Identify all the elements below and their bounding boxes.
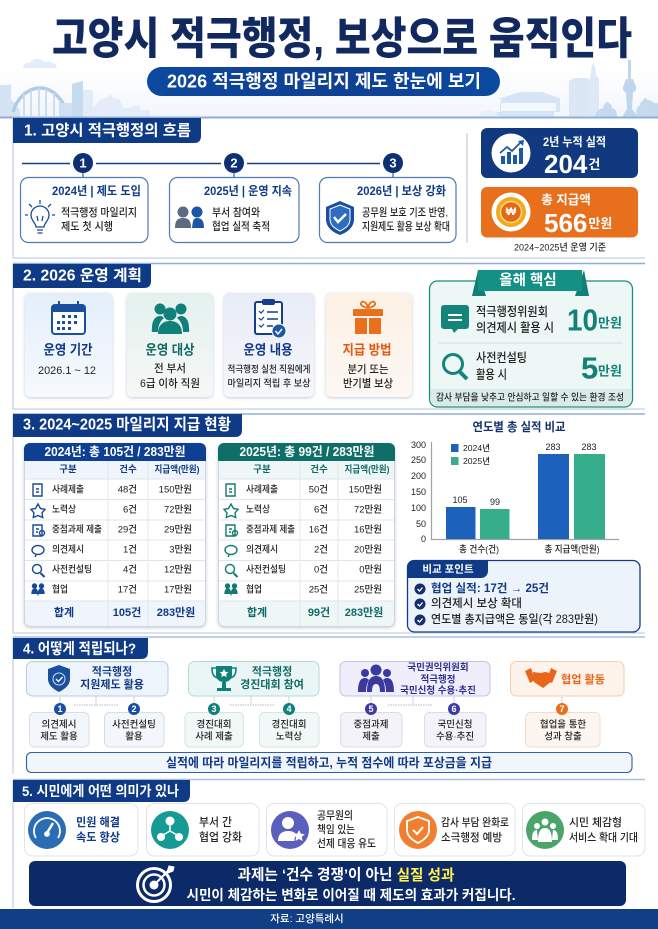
card: collaboration: 부서 간 — [199, 816, 232, 829]
panel: key points: 의견제시 활용 시 — [476, 320, 554, 335]
table: 2025: 16건 — [309, 524, 328, 536]
icons: row markers 2024 — [31, 484, 45, 594]
table: 2024: 건수 — [119, 464, 137, 476]
table: 2025: 6건 — [314, 504, 328, 516]
icon: won coin: ₩ — [506, 206, 517, 218]
table: 2025: 99건 — [308, 606, 330, 619]
card: 2026 — [320, 178, 456, 242]
card: target — [127, 293, 213, 397]
bar chart: 총 건수(건) — [459, 544, 499, 556]
panel: key points: 10 — [567, 302, 598, 338]
ribbon: 올해 핵심 — [499, 272, 557, 289]
table: 2024: 노력상 — [52, 504, 76, 516]
table: 2025: 사전컨설팅 — [246, 564, 286, 576]
group: citizen proposal: 적극행정 — [421, 674, 455, 686]
bar chart: 총 지급액(만원) — [544, 544, 600, 556]
icon: team — [152, 304, 189, 334]
card: period: 운영 기간 — [44, 342, 93, 358]
table: 2024: 283만원 — [157, 605, 195, 619]
card: content: 적극행정 실천 직원에게 — [228, 364, 310, 376]
table: 2024: 3만원 — [169, 544, 192, 556]
card: content: 운영 내용 — [244, 342, 292, 358]
panel: key points: 감사 부담을 낮추고 안심하고 일할 수 있는 환경 조성 — [436, 392, 624, 404]
table: 2025: 20만원 — [354, 544, 382, 556]
table: 2024: 중점과제 제출 — [52, 524, 102, 536]
card: 2025: 부서 참여와 — [212, 206, 260, 219]
table: 2025: 2025년: 총 99건 / 283만원 — [240, 445, 374, 459]
summary bar — [26, 752, 632, 772]
icon: magnifier — [444, 354, 467, 379]
table: 2024: 1건 — [123, 544, 137, 556]
numbered steps: 4 — [286, 704, 292, 714]
legend: 2025년 — [463, 456, 490, 466]
heading: section 1: 1. 고양시 적극행정의 흐름 — [24, 122, 191, 140]
bar chart: 99 — [490, 497, 500, 507]
card: audit relief: 감사 부담 완화로 — [441, 816, 509, 829]
card: speed: 민원 해결 — [76, 815, 120, 829]
table: 2024: 합계 — [54, 605, 74, 619]
step boxes: 중점과제 — [354, 718, 388, 730]
table: 2025 — [218, 443, 395, 626]
group: support system: 적극행정 — [92, 664, 132, 678]
table: 2025: 협업 — [246, 584, 262, 596]
group: contest: 경진대회 참여 — [240, 677, 304, 691]
heading: section 5 — [13, 780, 190, 802]
icons: check marks — [414, 584, 426, 626]
icon: rising chart — [500, 140, 524, 164]
step boxes: 제출 — [362, 732, 380, 742]
table: 2025: 2건 — [314, 544, 328, 556]
header background with skyline — [0, 59, 658, 118]
table: 2024: 17만원 — [164, 584, 192, 596]
card: responsibility — [266, 804, 387, 856]
stat: cumulative: 204건 — [544, 149, 600, 179]
banner — [29, 861, 626, 906]
table: 2025: 72만원 — [354, 504, 382, 516]
heading: section 2: 2. 2026 운영 계획 — [23, 266, 142, 284]
card: content: 마일리지 적립 후 보상 — [228, 378, 311, 390]
banner: 시민이 체감하는 변화로 이어질 때 제도의 효과가 커집니다. — [186, 887, 516, 903]
timeline: 3 — [389, 156, 397, 170]
group: citizen proposal: 국민신청 수용·추진 — [400, 684, 476, 696]
card: content — [224, 293, 314, 397]
icon: handshake — [525, 668, 557, 688]
icon: won coin — [496, 197, 526, 227]
card: speed: 속도 향상 — [76, 830, 120, 844]
card: responsibility: 선제 대응 유도 — [317, 836, 376, 850]
timeline — [22, 150, 406, 177]
table: 2024: 72만원 — [164, 504, 192, 516]
table: 2024: 17건 — [118, 584, 137, 596]
summary bar: 실적에 따라 마일리지를 적립하고, 누적 점수에 따라 포상금을 지급 — [166, 755, 492, 770]
table: 2024: 150만원 — [159, 484, 192, 496]
group: support system: 지원제도 활용 — [80, 677, 144, 691]
card: method: 반기별 보상 — [343, 377, 393, 390]
stat: cumulative: 2년 누적 실적 — [543, 135, 606, 149]
bar chart: 283 — [581, 442, 597, 452]
card: target: 전 부서 — [154, 362, 186, 375]
card: 2026: 지원제도 활용 보상 확대 — [362, 219, 450, 233]
bar chart: 200 — [411, 471, 426, 481]
card: method — [326, 293, 412, 397]
heading: section 3: 3. 2024~2025 마일리지 지급 현황 — [23, 416, 231, 434]
card: method: 분기 또는 — [348, 363, 388, 376]
icon: gauge — [34, 818, 60, 838]
card: responsibility: 공무원의 — [317, 808, 353, 822]
stat: total paid — [481, 187, 638, 238]
icon: speech bubble — [441, 305, 469, 333]
panel: section 4 how to earn — [13, 637, 645, 780]
icon: people — [175, 206, 204, 228]
table: 2025: 합계 — [247, 605, 267, 619]
group: citizen proposal — [340, 662, 490, 696]
table: 2024: 48건 — [118, 484, 137, 496]
table: 2025: 지급액(만원) — [344, 464, 390, 476]
numbered steps: 5 — [368, 704, 374, 714]
card: 2024: 2024년 | 제도 도입 — [52, 183, 141, 198]
panel: section 1 flow — [0, 118, 658, 258]
group: contest: 적극행정 — [252, 664, 292, 678]
panel: comparison points: 협업 실적: 17건 → 25건 — [431, 581, 549, 595]
table: 2024: 지급액(만원) — [154, 464, 200, 476]
table: 2024: 4건 — [123, 564, 137, 576]
card: collaboration: 협업 강화 — [199, 830, 242, 844]
icon: network — [157, 816, 183, 841]
table: 2025: 0건 — [314, 564, 328, 576]
step boxes: 의견제시 — [42, 720, 76, 730]
group: collaboration: 협업 활동 — [561, 672, 605, 686]
table: 2025: 50건 — [309, 484, 328, 496]
icon: checklist — [255, 299, 286, 338]
table: 2025: 구분 — [253, 464, 271, 476]
timeline: 2 — [230, 156, 238, 170]
panel: key points: 사전컨설팅 — [476, 351, 527, 365]
table: 2024: 구분 — [59, 464, 77, 476]
group: contest — [188, 662, 319, 696]
panel: key points: 5 — [581, 350, 598, 386]
panel: section 5 meaning — [13, 780, 645, 908]
numbered steps: 3 — [211, 704, 217, 714]
numbered steps: 1 — [57, 704, 63, 714]
table: 2025: 25건 — [309, 584, 328, 596]
bar chart: 250 — [411, 455, 426, 465]
footer source: 자료: 고양특례시 — [270, 912, 344, 925]
card: 2025 — [170, 178, 299, 242]
table: 2024: 29건 — [118, 524, 137, 536]
icon: gift — [353, 302, 383, 334]
card: period — [25, 293, 112, 397]
step boxes: 수용·추진 — [436, 732, 474, 742]
card: 2024: 제도 첫 시행 — [61, 220, 113, 233]
table: 2025: 의견제시 — [246, 544, 278, 556]
table: 2025: 0만원 — [359, 564, 382, 576]
panel: key points — [430, 270, 632, 407]
card: 2025: 협업 실적 축적 — [212, 219, 270, 233]
table: 2024: 105건 — [113, 606, 141, 619]
panel: key points: 활용 시 — [476, 367, 507, 382]
card: citizen service: 서비스 확대 기대 — [569, 830, 638, 844]
icon: person with star — [278, 817, 305, 841]
table: 2024: 6건 — [123, 504, 137, 516]
card: 2024 — [20, 178, 148, 242]
card: audit relief: 소극행정 예방 — [441, 831, 502, 844]
timeline: 1 — [79, 156, 87, 170]
table: 2024: 12만원 — [164, 564, 192, 576]
step boxes: 제도 활용 — [40, 730, 78, 742]
card: 2024: 적극행정 마일리지 — [61, 205, 137, 219]
icon: crowd — [532, 818, 558, 842]
panel: comparison points: 비교 포인트 — [422, 562, 474, 576]
card: 2025: 2025년 | 운영 지속 — [204, 184, 292, 198]
step boxes: 경진대회 — [197, 718, 231, 730]
step boxes: 활용 — [125, 730, 143, 742]
banner: 과제는 ‘건수 경쟁’이 아닌 실질 성과 — [238, 866, 455, 884]
card: target: 운영 대상 — [146, 342, 195, 358]
card: speed — [24, 804, 138, 856]
bar chart: 150 — [411, 487, 426, 497]
bar chart: 연도별 총 실적 비교 — [472, 420, 566, 434]
numbered steps: 7 — [559, 704, 565, 714]
legend — [451, 443, 490, 466]
table: 2024: 29만원 — [164, 524, 192, 536]
table: 2025: 건수 — [310, 464, 328, 476]
bar chart: 105 — [452, 495, 468, 505]
panel: section 2 plan — [13, 264, 645, 409]
ribbon — [472, 270, 589, 296]
bar chart: 100 — [411, 503, 426, 513]
bar chart: 0 — [421, 534, 426, 544]
card: audit relief — [394, 804, 515, 856]
step boxes: 국민신청 — [438, 720, 472, 730]
panel: key points: 만원 — [598, 364, 622, 378]
panel: comparison points: 연도별 총지급액은 동일(각 283만원) — [431, 612, 598, 626]
icons: row markers 2025 — [224, 484, 238, 594]
table: 2025: 노력상 — [246, 504, 270, 516]
card: collaboration — [146, 804, 259, 856]
table: 2025: 150만원 — [349, 484, 382, 496]
heading: section 4: 4. 어떻게 적립되나? — [23, 640, 136, 658]
bar chart: 50 — [416, 519, 426, 529]
icon: shield — [48, 665, 70, 692]
table: 2025: 25만원 — [354, 584, 382, 596]
table: 2024: 사례제출 — [52, 484, 84, 496]
table: 2025: 283만원 — [345, 605, 383, 619]
numbered steps — [54, 703, 568, 715]
icon: people — [358, 664, 394, 692]
card: 2026: 공무원 보호 기조 반영, — [362, 205, 448, 219]
card: method: 지급 방법 — [342, 342, 392, 358]
numbered steps: 2 — [131, 704, 137, 714]
step boxes: 경진대회 — [272, 718, 306, 730]
step boxes: 사례 제출 — [195, 732, 233, 742]
icon: target — [138, 866, 174, 902]
step boxes: 협업을 통한 — [540, 718, 586, 730]
card: 2026: 2026년 | 보상 강화 — [357, 183, 446, 198]
panel: comparison points — [407, 560, 640, 632]
footer source — [0, 909, 658, 929]
card: period: 2026.1 ~ 12 — [38, 365, 96, 377]
note: basis: 2024~2025년 운영 기준 — [514, 242, 606, 254]
group: citizen proposal: 국민권익위원회 — [407, 662, 469, 674]
table: 2024: 2024년: 총 105건 / 283만원 — [44, 445, 186, 459]
stat: cumulative — [481, 128, 638, 179]
card: responsibility: 책임 있는 — [317, 822, 355, 836]
icon: calendar — [52, 301, 85, 334]
icon: shield — [326, 201, 354, 235]
group: support system — [26, 662, 168, 696]
panel: comparison points: 의견제시 보상 확대 — [431, 596, 522, 610]
panel: key points: 적극행정위원회 — [476, 304, 548, 319]
step boxes: 성과 창출 — [544, 732, 582, 742]
bar chart — [411, 420, 619, 556]
subtitle pill: 2026 적극행정 마일리지 제도 한눈에 보기 — [167, 72, 481, 92]
panel: key points: 만원 — [598, 316, 622, 330]
stat: total paid: 총 지급액 — [541, 193, 591, 207]
panel: section 3 status — [13, 414, 645, 633]
bar chart: 300 — [411, 440, 426, 450]
icon: trophy — [212, 666, 236, 691]
table: 2024 — [24, 443, 206, 626]
step boxes: 사전컨설팅 — [112, 718, 156, 730]
card: citizen service: 시민 체감형 — [569, 815, 622, 829]
table: 2024: 의견제시 — [52, 544, 84, 556]
legend: 2024년 — [463, 443, 490, 453]
icon: light bulb — [25, 200, 55, 233]
heading: section 5: 5. 시민에게 어떤 의미가 있나 — [22, 783, 179, 799]
step boxes — [30, 712, 600, 747]
table: 2025: 사례제출 — [246, 484, 278, 496]
table: 2024: 협업 — [52, 584, 68, 596]
table: 2025: 중점과제 제출 — [246, 524, 295, 536]
heading: section 1 — [13, 118, 201, 143]
subtitle pill — [147, 67, 500, 96]
icon: shield check — [407, 817, 429, 843]
bar chart: 283 — [545, 442, 561, 452]
group: collaboration — [510, 662, 624, 696]
step boxes: 노력상 — [276, 730, 302, 742]
card: citizen service — [522, 804, 645, 856]
table: 2025: 16만원 — [354, 524, 382, 536]
card: target: 6급 이하 직원 — [140, 376, 200, 390]
heading: section 2 — [13, 264, 151, 288]
heading: section 3 — [13, 414, 242, 437]
table: 2024: 사전컨설팅 — [52, 564, 92, 576]
numbered steps: 6 — [451, 704, 457, 714]
stat: total paid: 566만원 — [544, 208, 612, 238]
